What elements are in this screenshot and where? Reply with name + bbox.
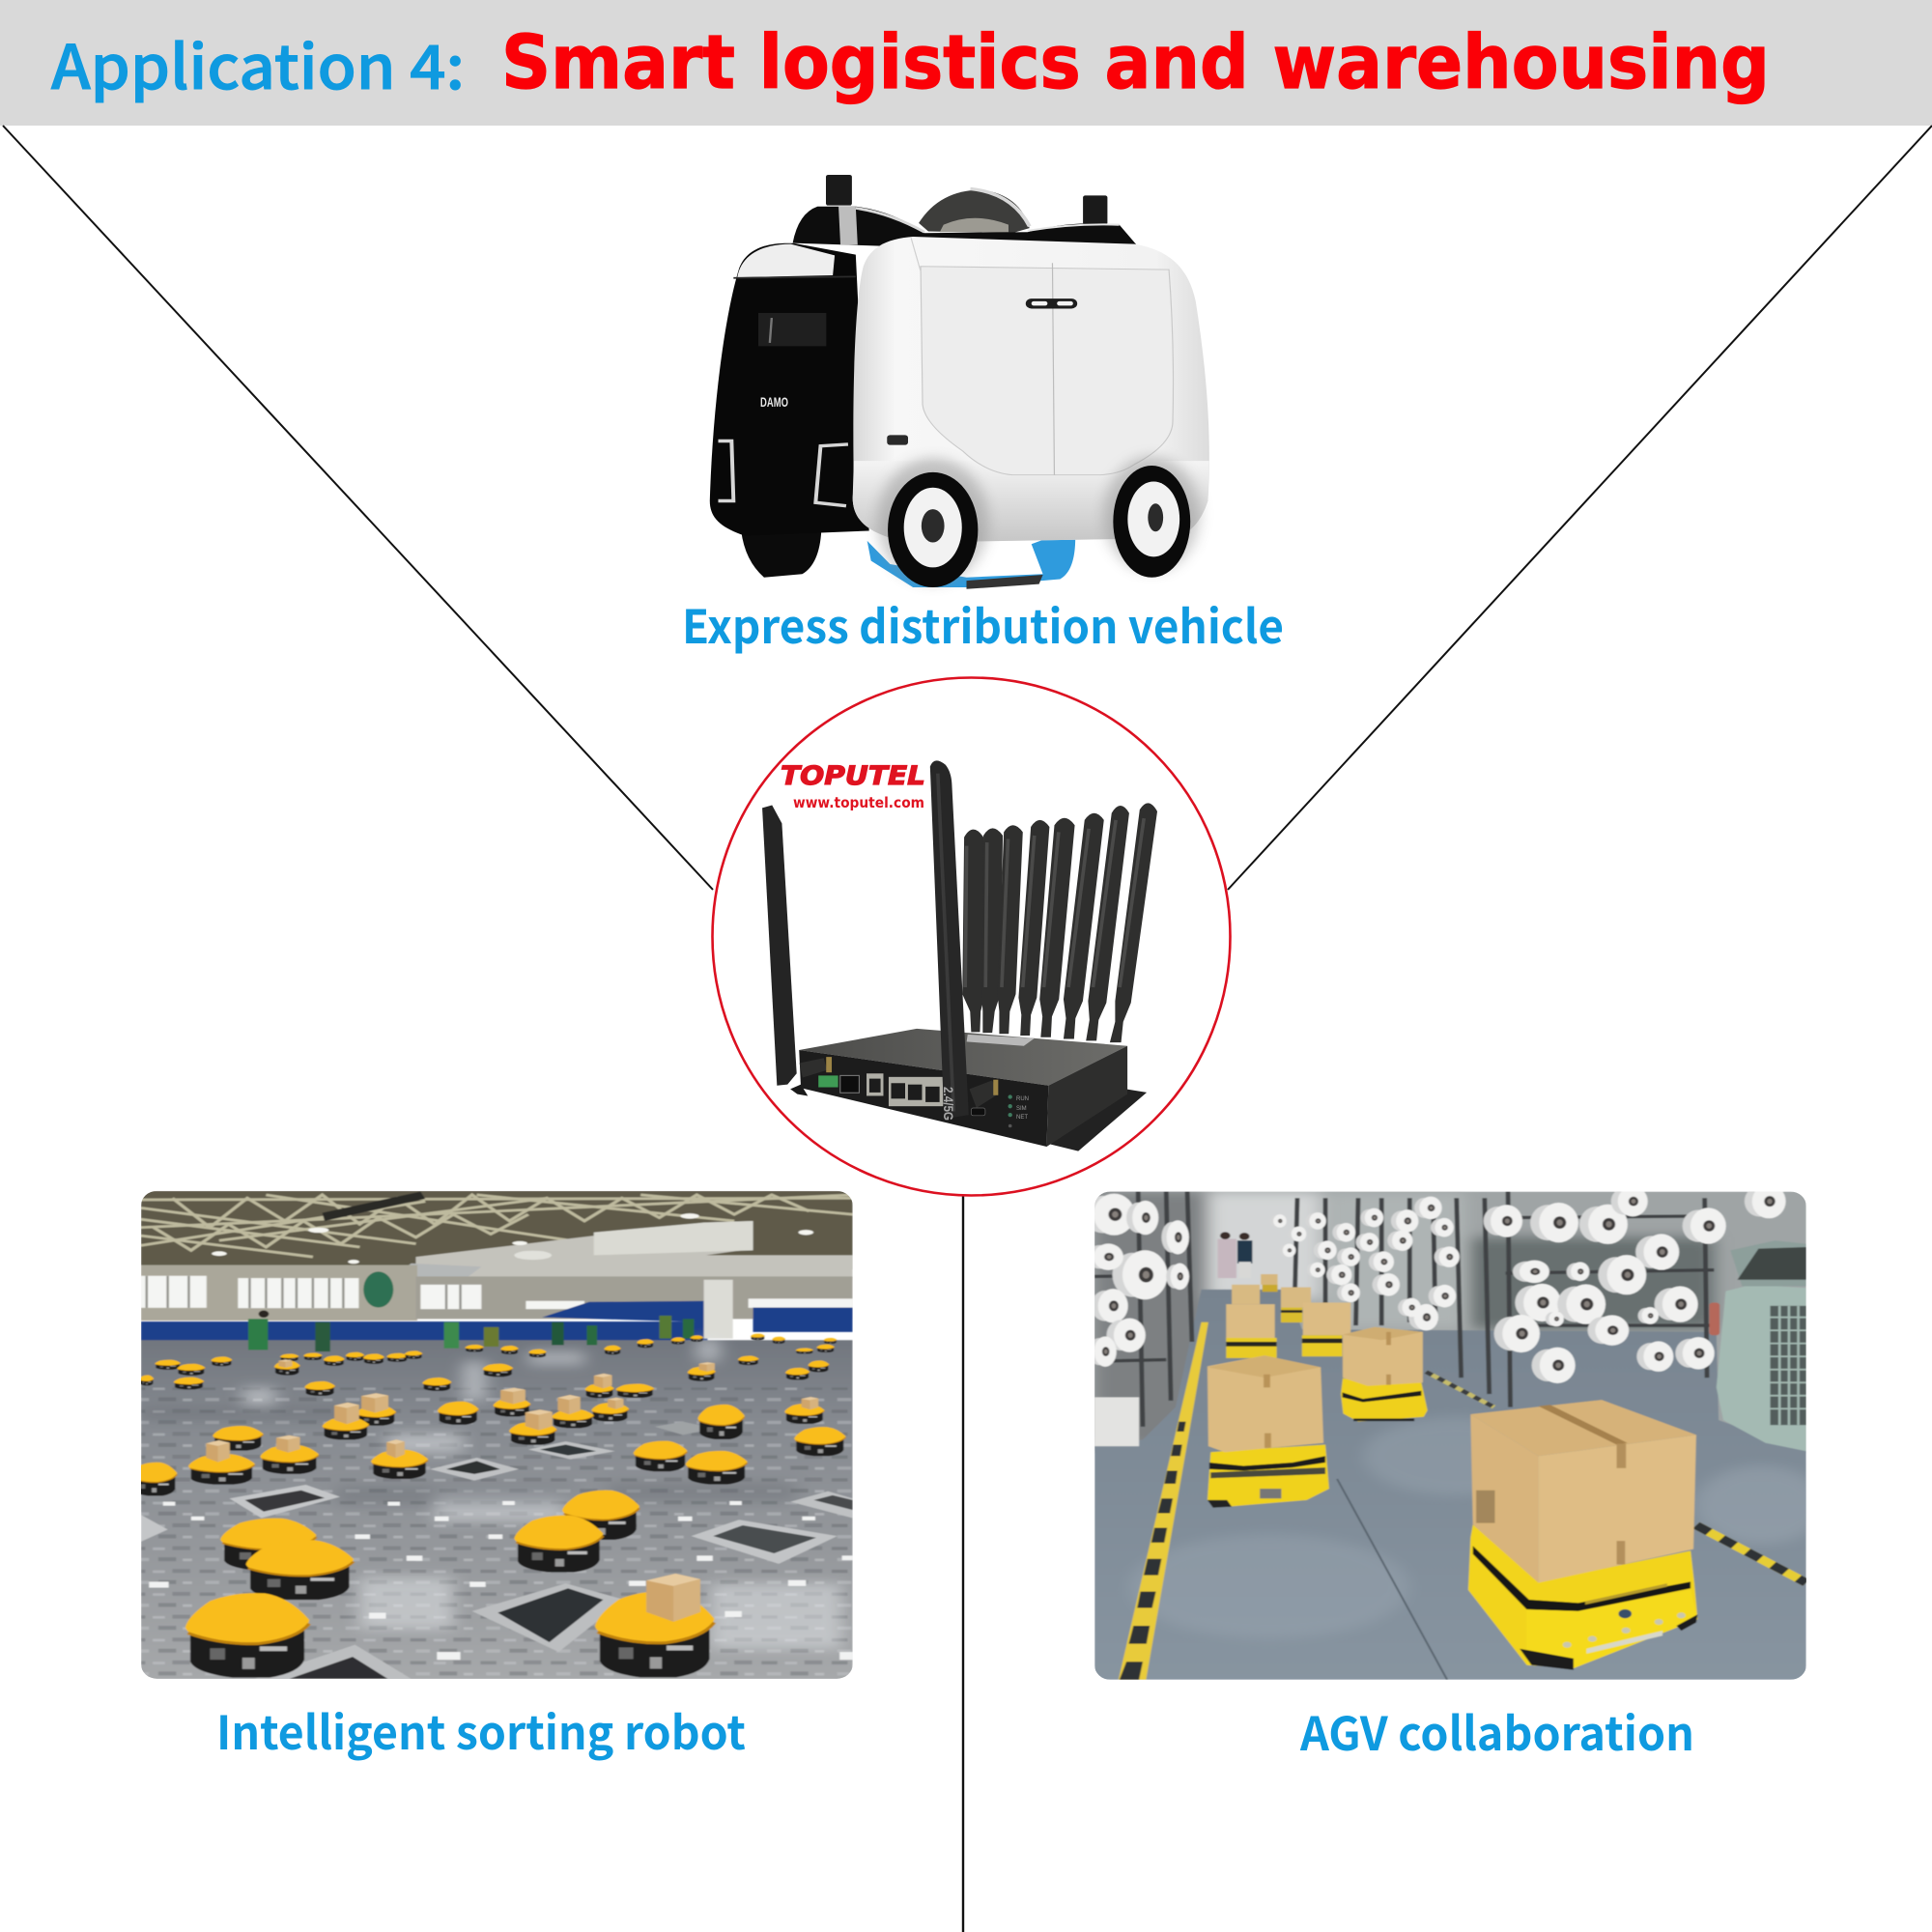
photo left hazard stripe — [1119, 1322, 1208, 1680]
vehicle lidar left — [826, 175, 852, 206]
panel: intelligent sorting robot photo — [130, 1191, 853, 1680]
photo floor tiles — [141, 1387, 853, 1680]
router LED labels — [1016, 1096, 1029, 1121]
photo floor — [1094, 1290, 1806, 1680]
vehicle front wheel — [888, 472, 978, 587]
photo ceiling lights — [212, 1213, 813, 1264]
photo spool racks poles — [1094, 1192, 1714, 1427]
photo large parcel — [1470, 1400, 1696, 1582]
vehicle black front — [710, 243, 869, 536]
vehicle door handle — [1026, 298, 1077, 308]
photo floor markers — [149, 1501, 853, 1660]
left antenna — [762, 806, 797, 1086]
router label — [967, 1035, 1035, 1046]
router flanges — [790, 1085, 808, 1095]
connector: top left to hub — [3, 126, 713, 890]
photo distant robots — [140, 1334, 837, 1389]
brand logo: TOPUTEL — [781, 761, 925, 791]
router terminal block — [818, 1075, 838, 1088]
photo floor texture — [1128, 1417, 1827, 1639]
router front face — [799, 1050, 1048, 1147]
photo column — [704, 1280, 733, 1339]
vehicle side light — [887, 435, 908, 445]
photo floor seam — [1337, 1479, 1447, 1680]
photo wall — [141, 1265, 417, 1321]
photo ceiling truss — [141, 1195, 853, 1257]
photo teal machine — [1717, 1240, 1806, 1451]
photo green drum — [363, 1271, 393, 1308]
vehicle brand mark: DAMO — [760, 394, 788, 410]
vehicle back wheel — [1113, 466, 1190, 578]
vehicle wheel arch shading — [877, 456, 1200, 584]
title main: Smart logistics and warehousing — [501, 20, 1770, 106]
router status LEDs — [1009, 1094, 1012, 1127]
router ethernet ports — [867, 1073, 943, 1106]
router paddle antennas — [962, 803, 1157, 1042]
vehicle rear wheel and undercarriage — [741, 531, 821, 578]
photo distant workers — [248, 1311, 694, 1351]
photo AGV middle left — [1208, 1355, 1329, 1508]
label: AGV collaboration: AGV collaboration — [1299, 1696, 1694, 1764]
hub: 5G router — [762, 760, 1157, 1151]
photo AGV middle right — [1341, 1327, 1428, 1422]
photo foreground robots — [185, 1491, 715, 1678]
router right connector — [970, 1080, 998, 1108]
photo white roll left — [1094, 1397, 1139, 1446]
icon: express delivery vehicle — [710, 175, 1209, 589]
photo blue conveyors — [141, 1300, 853, 1341]
title prefix: Application 4: — [51, 19, 465, 107]
router top surface — [799, 1029, 1127, 1086]
label: intelligent sorting robot: Intelligent sorting robot — [216, 1695, 746, 1763]
router USB port — [971, 1108, 985, 1116]
photo ceiling — [141, 1191, 853, 1269]
router LED labels: NET — [1016, 1115, 1028, 1121]
header band — [0, 0, 1932, 126]
vehicle handles — [718, 441, 733, 501]
center tall antenna — [930, 760, 969, 1119]
photo white yarn spools — [1084, 1184, 1786, 1383]
photo floor hatches — [141, 1422, 853, 1679]
photo parcels — [206, 1359, 818, 1622]
photo fire extinguisher — [1709, 1302, 1719, 1335]
photo mid-field robots — [130, 1378, 845, 1495]
hub circle — [713, 678, 1231, 1196]
vehicle front grille — [758, 313, 826, 346]
photo white ducts — [409, 1220, 853, 1277]
brand URL: www.toputel.com — [793, 794, 924, 811]
photo workers — [1218, 1232, 1252, 1278]
photo right hazard stripes — [1426, 1372, 1806, 1582]
vehicle door panel — [921, 267, 1174, 475]
photo windows — [141, 1276, 853, 1309]
photo AGV foreground — [1468, 1524, 1697, 1670]
vehicle dome — [919, 189, 1030, 233]
router LED labels: RUN — [1016, 1096, 1029, 1102]
connector: top right to hub — [1228, 126, 1932, 890]
photo duct beam — [323, 1192, 425, 1221]
title — [51, 19, 1770, 107]
vehicle white body — [853, 237, 1209, 543]
photo floor reflections — [242, 1339, 842, 1649]
photo floor — [141, 1340, 853, 1680]
router antenna highlights — [965, 818, 1144, 987]
vehicle roof — [793, 207, 1136, 248]
label: express distribution vehicle: Express distribution vehicle — [682, 589, 1284, 657]
photo factory background — [1094, 1192, 1806, 1453]
vehicle lidar right — [1083, 195, 1107, 225]
router antenna text: 2.4/5G — [941, 1087, 956, 1121]
router LED labels: SIM — [1016, 1106, 1027, 1112]
panel: AGV collaboration photo — [1084, 1184, 1827, 1680]
router SFP port — [840, 1075, 859, 1093]
router right side — [1047, 1046, 1127, 1147]
connector: hub to bottom — [962, 1196, 964, 1932]
router left connector — [800, 1057, 832, 1078]
photo far AGVs — [1226, 1274, 1350, 1358]
